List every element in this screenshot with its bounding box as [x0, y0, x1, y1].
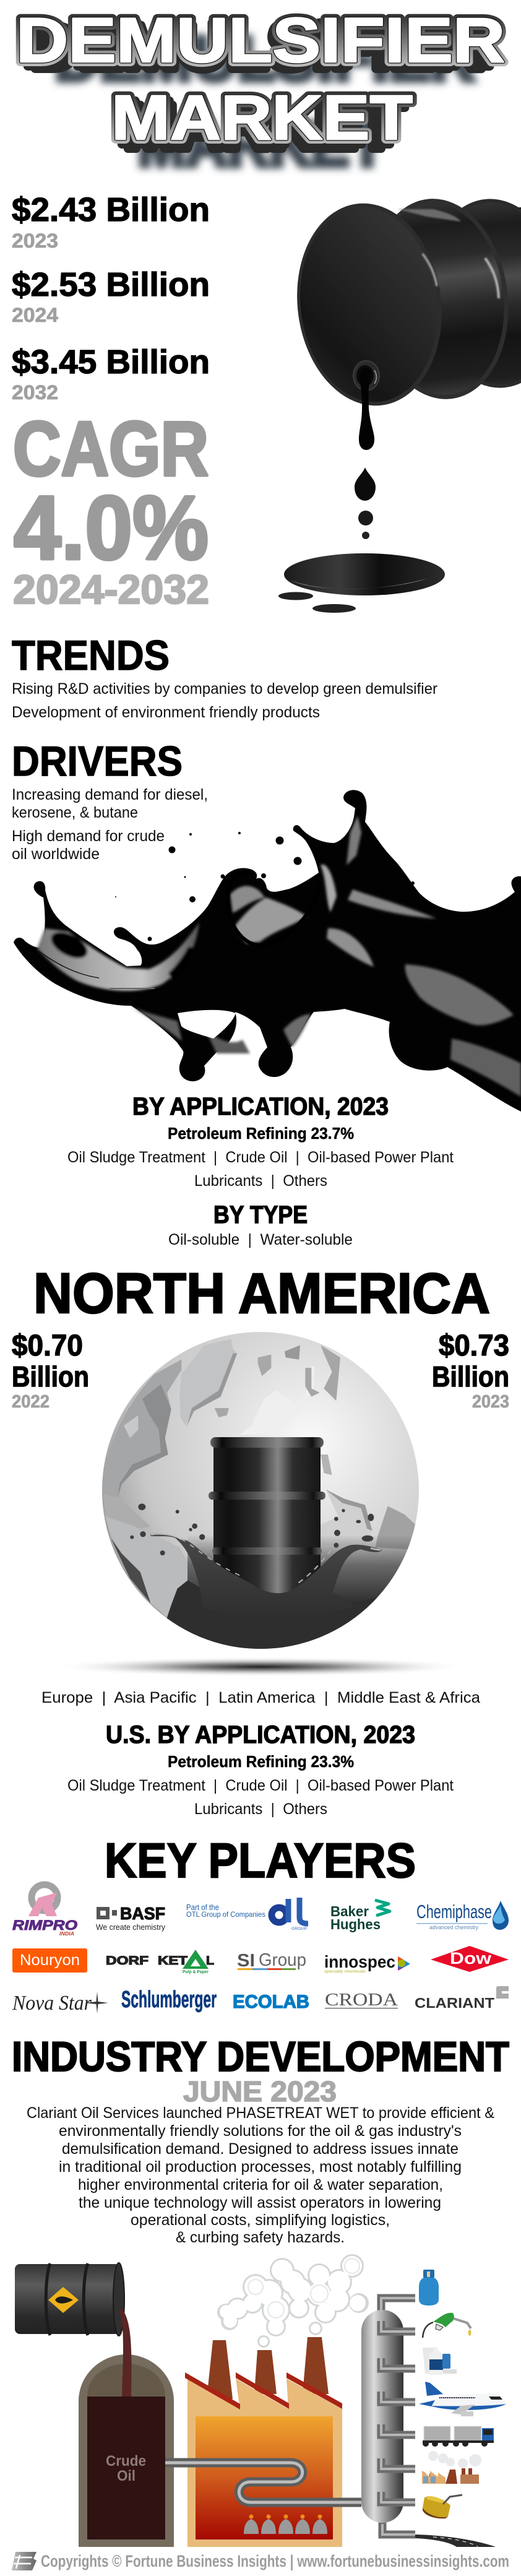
logo: Innospec: specialty chemicals: [324, 1969, 366, 1974]
development description: demulsification demand. Designed to address issues innate: [62, 2140, 459, 2158]
key players heading: KEY PLAYERS: [105, 1833, 416, 1888]
icon: truck: [423, 2426, 494, 2447]
title: Demulsifier Market: DEMULSIFIER: [24, 9, 491, 80]
oil drum on side: [15, 2263, 124, 2336]
title: Demulsifier Market: DEMULSIFIER: [54, 24, 475, 94]
logo: Chemiphase: advanced chemistry: [429, 1924, 478, 1931]
U.S. by application: Lubricants | Others: [194, 1800, 327, 1818]
logo: Rimpro: [12, 1885, 77, 1937]
development description: the unique technology will assist operators in lowering: [79, 2194, 441, 2211]
logo: dtl group: [186, 1898, 308, 1931]
region heading: North America: NORTH AMERICA: [33, 1262, 490, 1325]
drivers: oil worldwide: [12, 845, 100, 863]
development description: [27, 2104, 494, 2246]
barrel on globe: [209, 1437, 325, 1594]
footer logo: [12, 2552, 37, 2570]
icon: fuel can: [423, 2495, 462, 2518]
by type: BY TYPE: [213, 1201, 308, 1229]
icon: fuel nozzle: [423, 2313, 471, 2338]
by application: Oil Sludge Treatment | Crude Oil | Oil-based Power Plant: [67, 1149, 454, 1166]
distillation column: [361, 2298, 415, 2535]
continents: [101, 1339, 416, 1617]
logo: BASF: [96, 1904, 166, 1932]
illustration: globe with oil barrel and splash: [101, 1332, 423, 1661]
by application: [67, 1093, 454, 1190]
drivers: [12, 738, 208, 863]
development description: operational costs, simplifying logistics,: [131, 2211, 390, 2229]
title: Demulsifier Market: MARKET: [111, 82, 413, 153]
logo: Baker Hughes: Baker: [330, 1903, 369, 1919]
logo: Schlumberger: Schlumberger: [121, 1987, 217, 2013]
splash hole: [178, 1010, 236, 1039]
splash inner ring: [228, 872, 320, 945]
splash highlights: [37, 816, 521, 1097]
market size figures: 2032: [12, 381, 58, 404]
heating pipe: [165, 2463, 361, 2502]
development description: environmentally friendly solutions for the oil & gas industry's: [59, 2122, 462, 2140]
icon: airplane: [419, 2382, 506, 2416]
logo: Clariant: CLARIANT: [415, 1995, 494, 2011]
logo: Rimpro: RIMPRO: [12, 1917, 77, 1933]
CAGR block: [13, 407, 209, 612]
CAGR block: 2024-2032: [13, 566, 209, 612]
logo: NovaStar: Nova Star: [12, 1992, 92, 2015]
title: Demulsifier Market: MARKET: [124, 92, 396, 162]
storage tank with crude oil: [79, 2309, 174, 2547]
logo: Dorf Ketal: DORF: [106, 1955, 149, 1968]
title: Demulsifier Market: DEMULSIFIER: [31, 12, 483, 82]
drivers: Increasing demand for diesel,: [12, 786, 208, 803]
burners: [244, 2514, 327, 2534]
title: Demulsifier Market: [16, 5, 505, 179]
logo: Clariant: [415, 1986, 509, 2011]
oil crown splash: [130, 1503, 382, 1620]
key player logos: [12, 1885, 509, 2015]
logo: Dow: Dow: [450, 1949, 492, 1968]
oil pool: [167, 1581, 377, 1649]
logo: Dorf Ketal: [106, 1950, 214, 1974]
market size figures: $2.43 Billion: [12, 191, 210, 228]
logo: Baker Hughes: [330, 1900, 390, 1932]
market size figures: $3.45 Billion: [12, 344, 210, 381]
logo: Dorf Ketal: Pulp & Paper: [183, 1970, 209, 1974]
development description: & curbing safety hazards.: [176, 2229, 345, 2246]
illustration: black oil splash: [14, 790, 521, 1112]
North America 2023 value: $0.73: [439, 1329, 509, 1362]
logo: Dow: [431, 1946, 509, 1972]
logo: dtl group: GROUP: [291, 1927, 307, 1931]
logo: SI Group: Group: [259, 1950, 306, 1970]
dark lower globe shading: [187, 1537, 411, 1649]
drivers: High demand for crude: [12, 828, 165, 845]
icon: small factories: [422, 2451, 481, 2484]
logo: Croda: CRODA: [325, 1990, 398, 2010]
drivers: kerosene, & butane: [12, 804, 138, 821]
North America 2023 value: [432, 1329, 509, 1412]
by type: [168, 1201, 353, 1248]
logo: Rimpro: INDIA: [59, 1931, 74, 1937]
North America 2023 value: Billion: [432, 1360, 509, 1393]
title: Demulsifier Market: DEMULSIFIER: [16, 5, 505, 76]
illustration: tilted oil barrel dripping into puddle: [278, 193, 521, 613]
logo: Baker Hughes: Hughes: [330, 1916, 381, 1932]
title: Demulsifier Market: MARKET: [111, 82, 413, 153]
trends: [12, 632, 437, 721]
title: Demulsifier Market: DEMULSIFIER: [16, 5, 505, 76]
trends: TRENDS: [12, 632, 170, 679]
factory building: [185, 2337, 342, 2547]
title: Demulsifier Market: MARKET: [111, 82, 413, 153]
logo: BASF: We create chemistry: [96, 1923, 166, 1932]
storage tank with crude oil: Crude: [106, 2453, 146, 2470]
trends: Development of environment friendly products: [12, 704, 320, 721]
drivers: DRIVERS: [12, 738, 183, 785]
U.S. by application: Oil Sludge Treatment | Crude Oil | Oil-based Power Plant: [67, 1777, 454, 1794]
illustration: refinery process: [15, 2254, 506, 2547]
globe ground shadow: [50, 1657, 471, 1677]
North America 2022 value: [12, 1329, 89, 1412]
CAGR block: CAGR: [13, 407, 209, 492]
by application: Lubricants | Others: [194, 1172, 327, 1190]
North America 2022 value: Billion: [12, 1360, 89, 1393]
icon: chemical bottles: [423, 2346, 457, 2375]
smoke clouds: [217, 2254, 369, 2348]
logo: Innospec: innospec: [324, 1952, 395, 1971]
development description: higher environmental criteria for oil & water separation,: [78, 2176, 443, 2193]
CAGR block: 4.0%: [14, 477, 209, 578]
logo: Dorf Ketal: L: [206, 1955, 214, 1968]
North America 2023 value: 2023: [472, 1392, 509, 1412]
logo: SI Group: [237, 1950, 306, 1971]
U.S. by application: [67, 1721, 454, 1818]
title: Demulsifier Market: DEMULSIFIER: [16, 5, 505, 76]
title: Demulsifier Market: MARKET: [137, 109, 385, 179]
logo: Chemiphase: [416, 1901, 509, 1931]
U.S. by application: U.S. BY APPLICATION, 2023: [106, 1721, 415, 1748]
icon: road: [415, 2535, 496, 2547]
by application: Petroleum Refining 23.7%: [168, 1124, 354, 1143]
icon: gas cylinder: [419, 2270, 439, 2306]
development description: Clariant Oil Services launched PHASETREAT WET to provide efficient &: [27, 2104, 494, 2122]
logo: BASF: BASF: [120, 1904, 165, 1923]
title: Demulsifier Market: MARKET: [118, 87, 405, 158]
trends: Rising R&D activities by companies to develop green demulsifier: [12, 680, 437, 698]
logo: Nouryon: [12, 1948, 87, 1973]
logo: dtl group: OTL Group of Companies: [186, 1910, 265, 1919]
North America 2022 value: $0.70: [12, 1329, 83, 1362]
market size figures: 2023: [12, 230, 58, 252]
logo: Chemiphase: Chemiphase: [416, 1901, 492, 1922]
market size figures: 2024: [12, 304, 58, 326]
logo: dtl group: Part of the: [186, 1903, 219, 1912]
market size figures: [12, 191, 210, 404]
by type: Oil-soluble | Water-soluble: [168, 1231, 353, 1248]
by application: BY APPLICATION, 2023: [132, 1093, 389, 1120]
storage tank with crude oil: Oil: [117, 2468, 136, 2484]
market size figures: $2.53 Billion: [12, 266, 210, 303]
logo: Ecolab: ECOLAB: [233, 1992, 309, 2012]
date: June 2023: JUNE 2023: [183, 2075, 337, 2107]
logo: Nouryon: Nouryon: [20, 1951, 80, 1969]
splash droplets: [115, 832, 415, 941]
other regions: Europe | Asia Pacific | Latin America | Middle East & Africa: [41, 1689, 480, 1706]
development description: in traditional oil production processes, most notably fulfilling: [59, 2158, 462, 2176]
North America 2022 value: 2022: [12, 1392, 50, 1412]
U.S. by application: Petroleum Refining 23.3%: [168, 1752, 354, 1771]
logo: Dorf Ketal: KET: [158, 1955, 187, 1968]
logo: SI Group: SI: [237, 1951, 255, 1971]
